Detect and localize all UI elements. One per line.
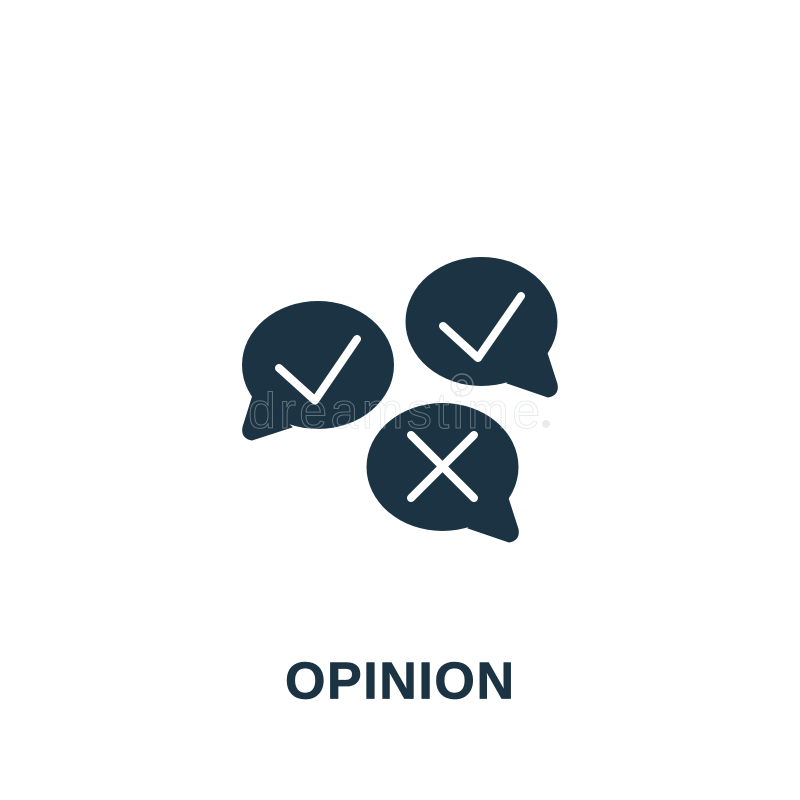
icon: upper right speech bubble with check mark: [406, 257, 558, 397]
watermark: dreamstime: [248, 383, 540, 439]
icon: lower speech bubble with cross mark: [366, 403, 518, 542]
icon: opinion speech bubbles: [242, 257, 558, 542]
title: OPINION: [285, 652, 514, 710]
icon: left speech bubble with check mark: [242, 301, 394, 440]
